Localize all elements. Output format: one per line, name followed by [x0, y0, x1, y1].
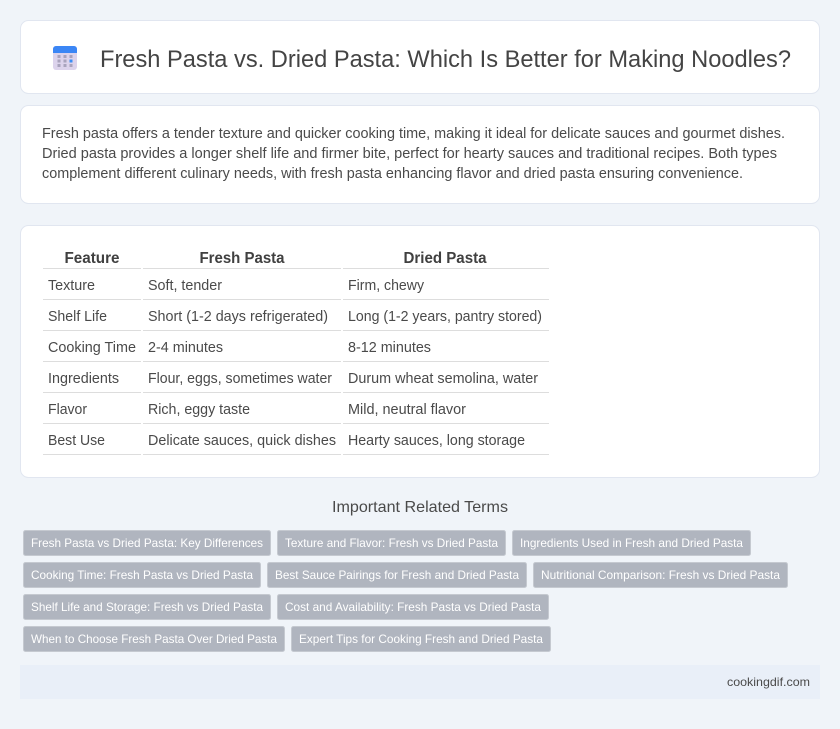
tag 1: [24, 530, 270, 556]
row: ingredients: [48, 371, 538, 387]
tag 5: [268, 562, 526, 588]
row: texture: [48, 278, 425, 294]
row: flavor: Rich, eggy taste: [148, 402, 250, 418]
row: ingredients: Durum wheat semolina, water: [348, 371, 538, 387]
icon: calendar: [53, 46, 77, 70]
related term tags: [24, 530, 788, 652]
row: flavor: Mild, neutral flavor: [348, 402, 466, 418]
panel: comparison table: [20, 226, 820, 478]
tag 9: [24, 626, 284, 652]
tag 2: [278, 530, 506, 556]
row: cooking time: 2-4 minutes: [148, 340, 223, 356]
table header: [64, 250, 487, 267]
tag 8: [278, 594, 548, 620]
tag 7: [24, 594, 270, 620]
tag 6: Nutritional Comparison: Fresh vs Dried Pasta: [541, 568, 780, 582]
tag 7: Shelf Life and Storage: Fresh vs Dried Pasta: [31, 600, 263, 614]
row: cooking time: 8-12 minutes: [348, 340, 431, 356]
tag 9: When to Choose Fresh Pasta Over Dried Pasta: [31, 632, 277, 646]
panel: introduction: [20, 106, 820, 204]
row: cooking time: Cooking Time: [48, 340, 136, 356]
table header: Dried Pasta: [404, 250, 487, 267]
row: texture: Firm, chewy: [348, 278, 425, 294]
row: shelf life: Short (1-2 days refrigerated): [148, 309, 328, 325]
intro text: complement different culinary needs, with fresh pasta enhancing flavor and dried pasta ensuring convenience.: [42, 166, 743, 182]
heading: important related terms: Important Related Terms: [332, 499, 508, 516]
row: shelf life: Long (1-2 years, pantry stored): [348, 309, 542, 325]
row: best use: Delicate sauces, quick dishes: [148, 433, 336, 449]
tag 4: [24, 562, 260, 588]
tag 3: [512, 530, 750, 556]
tag 6: [534, 562, 788, 588]
tag 8: Cost and Availability: Fresh Pasta vs Dried Pasta: [285, 600, 541, 614]
header panel: [20, 20, 820, 94]
row: ingredients: Ingredients: [48, 371, 119, 387]
row: texture: Soft, tender: [148, 278, 222, 294]
tag 4: Cooking Time: Fresh Pasta vs Dried Pasta: [31, 568, 253, 582]
row: flavor: Flavor: [48, 402, 87, 418]
table header: Feature: [64, 250, 120, 267]
intro text: Fresh pasta offers a tender texture and quicker cooking time, making it ideal for delicate sauces and gourmet dishes.: [42, 126, 785, 142]
intro text: [42, 126, 785, 182]
row: best use: Best Use: [48, 433, 105, 449]
row: flavor: [48, 402, 466, 418]
row: texture: Texture: [48, 278, 95, 294]
row: best use: [48, 433, 525, 449]
row: ingredients: Flour, eggs, sometimes water: [148, 371, 332, 387]
row: shelf life: [48, 309, 542, 325]
tag 10: [292, 626, 550, 652]
tag 2: Texture and Flavor: Fresh vs Dried Pasta: [285, 536, 498, 550]
tag 5: Best Sauce Pairings for Fresh and Dried Pasta: [275, 568, 519, 582]
intro text: Dried pasta provides a longer shelf life and firmer bite, perfect for hearty sauces and traditional recipes. Both types: [42, 146, 777, 162]
tag 1: Fresh Pasta vs Dried Pasta: Key Differences: [31, 536, 263, 550]
footer source: cookingdif.com: [727, 675, 810, 689]
tag 3: Ingredients Used in Fresh and Dried Pasta: [520, 536, 743, 550]
tag 10: Expert Tips for Cooking Fresh and Dried Pasta: [299, 632, 543, 646]
row: cooking time: [48, 340, 431, 356]
title: Fresh Pasta vs. Dried Pasta: Which Is Better for Making Noodles?: [100, 46, 791, 73]
footer: [20, 665, 820, 699]
row: shelf life: Shelf Life: [48, 309, 107, 325]
row: best use: Hearty sauces, long storage: [348, 433, 525, 449]
table header: Fresh Pasta: [200, 250, 285, 267]
